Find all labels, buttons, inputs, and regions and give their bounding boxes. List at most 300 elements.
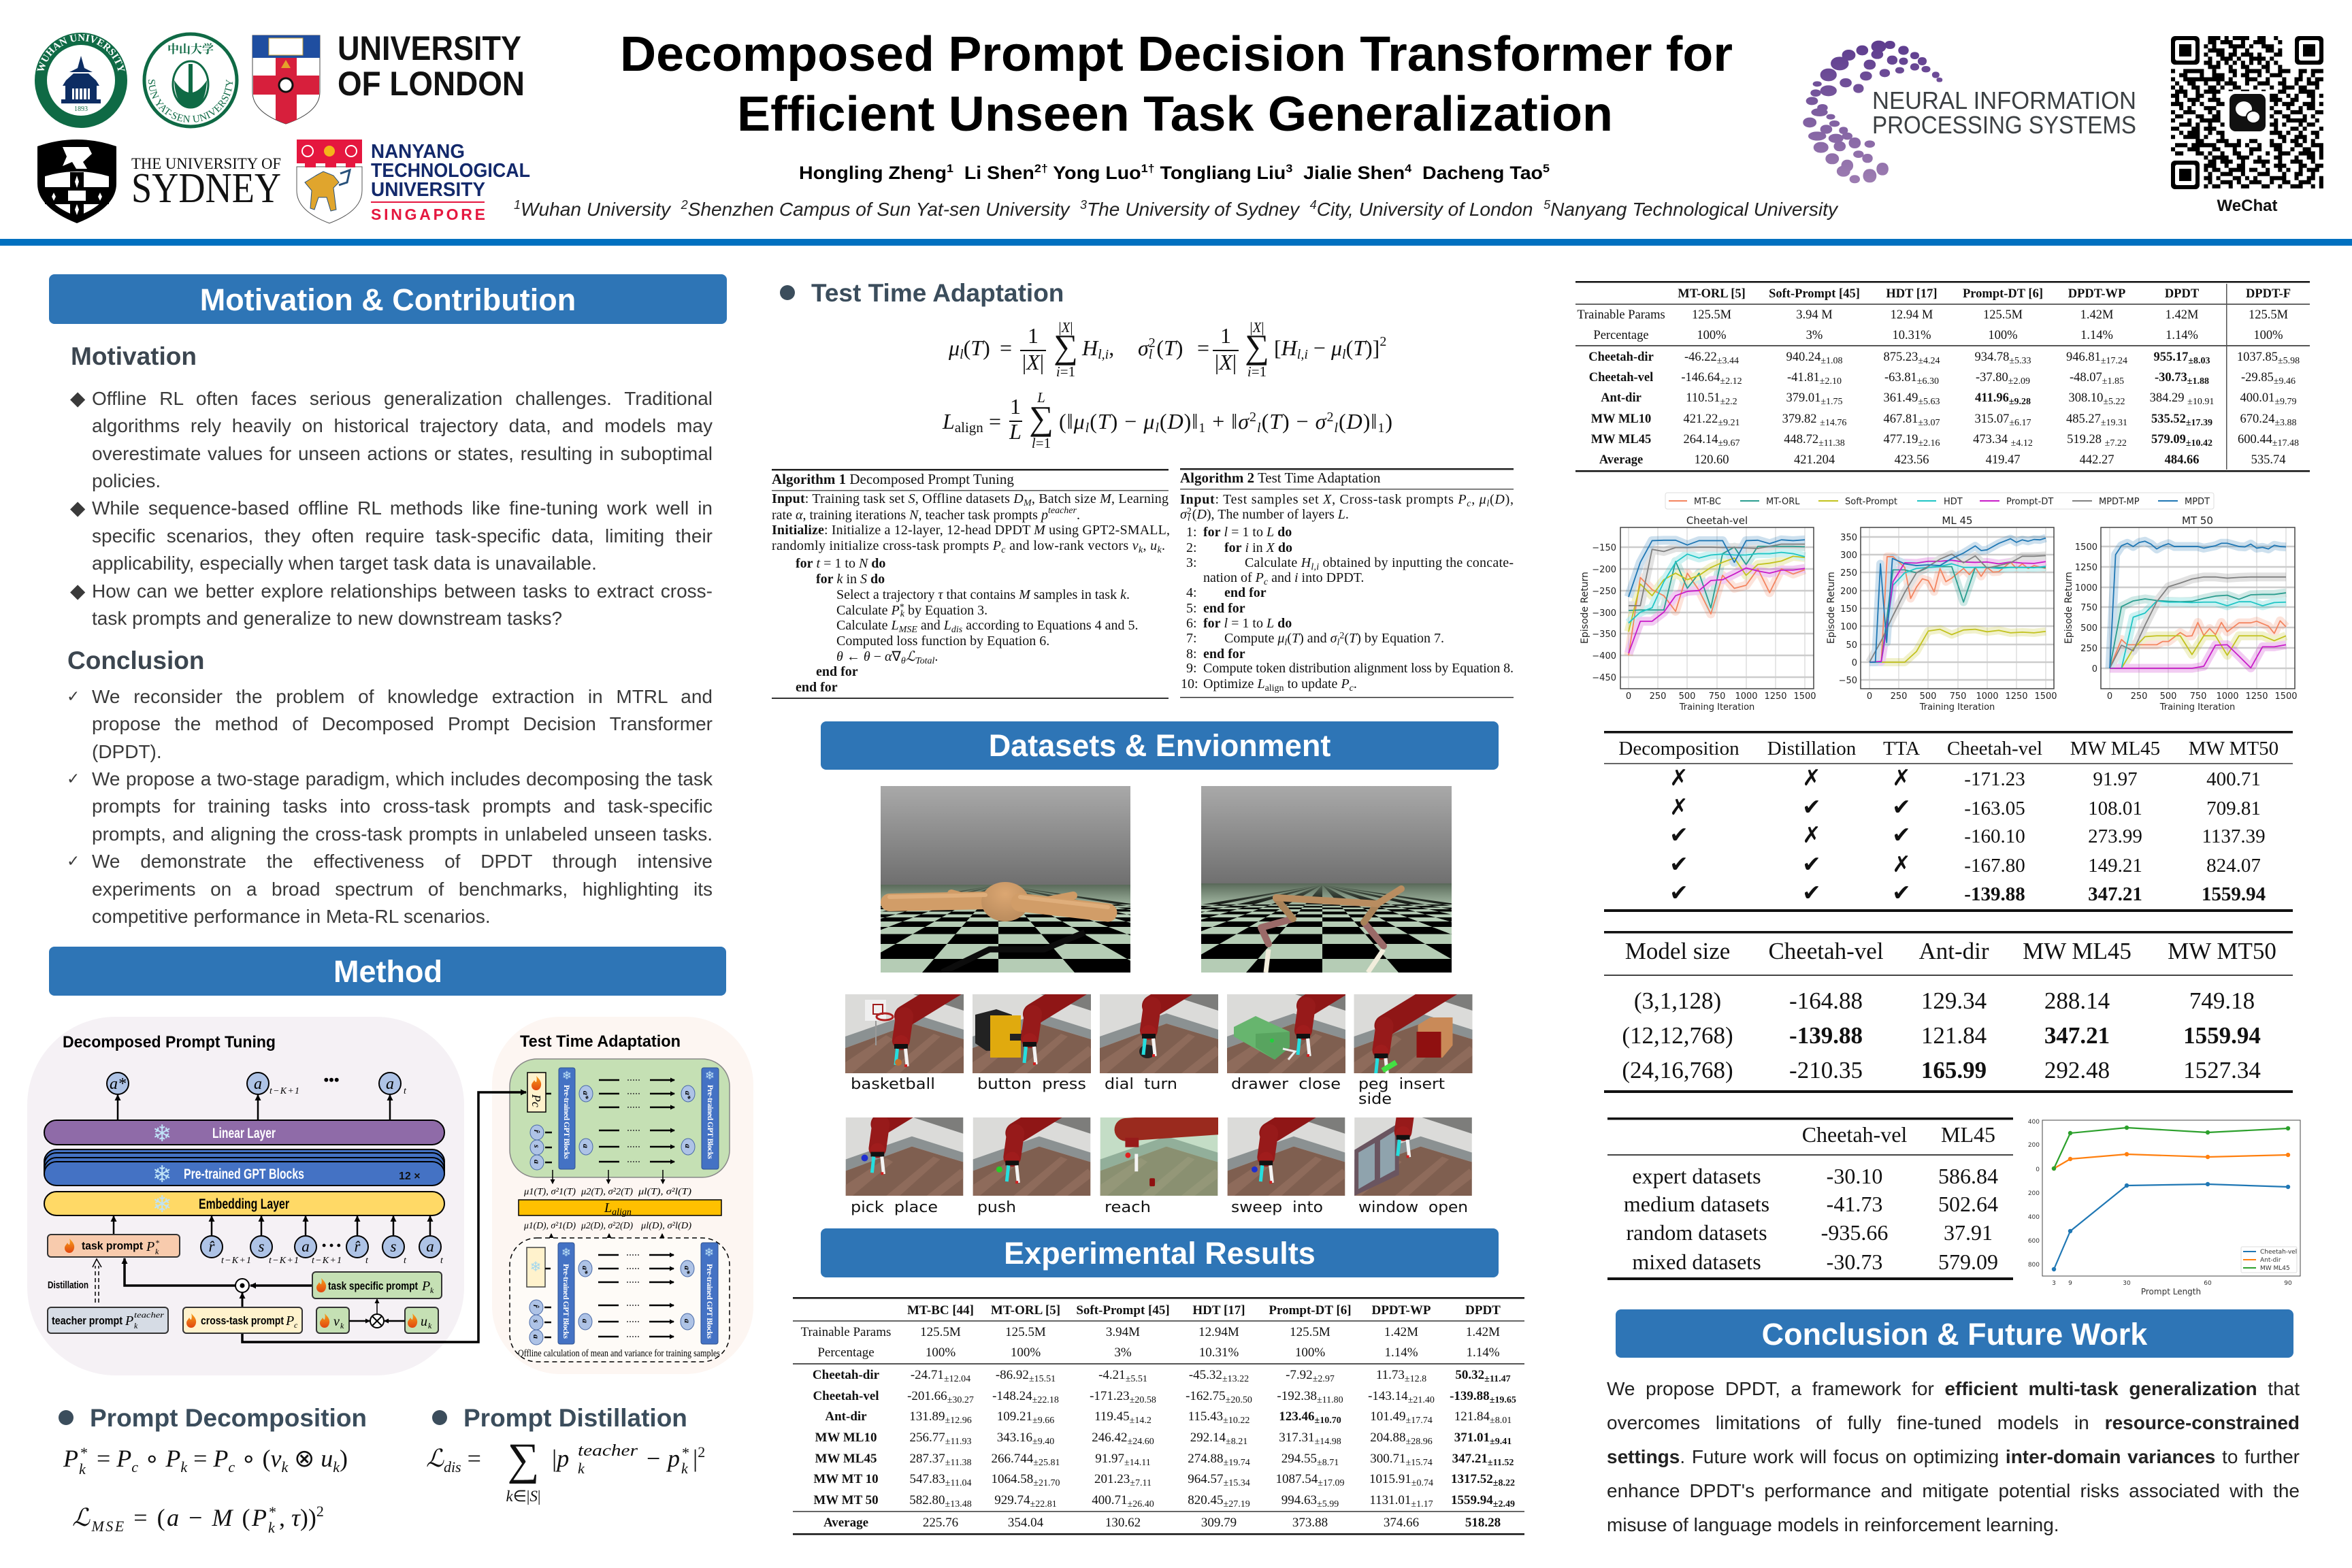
table: model size: (3,1,128)	[1634, 987, 1721, 1014]
table: experimental results: ±11.93	[945, 1437, 971, 1447]
line chart: ML 45: 750	[1950, 691, 1966, 702]
table: dataset quality: -30.73	[1827, 1250, 1882, 1274]
bullet: generalization challenges: algorithms rely heavily on historical trajectory data, and models may	[92, 415, 713, 436]
heading: Prompt Decomposition: Prompt Decomposition	[90, 1404, 367, 1432]
formula: prompt decomposition: k	[79, 1460, 86, 1477]
table: experimental results: 343.16	[997, 1431, 1054, 1447]
logo text: Nanyang Technological University Singapore: NANYANG	[371, 141, 465, 163]
logo text: University of London	[338, 29, 525, 103]
algorithm 1 box: .	[934, 649, 938, 664]
algorithm 1 box: end for	[816, 664, 858, 679]
line chart: Cheetah-vel: 1500	[1793, 691, 1816, 702]
algorithm 1 box: , Batch size	[1032, 491, 1100, 506]
green online network box: a	[683, 1144, 693, 1148]
section header: Conclusion & Future Work	[1616, 1309, 2293, 1358]
table: ablation study: ✔	[1669, 879, 1688, 906]
input tokens: s	[259, 1238, 265, 1255]
table: experimental results: 100%	[1295, 1345, 1325, 1360]
table: comparison with fine-tuned models: ±6.30	[1917, 376, 1939, 387]
algorithm 1 box: ,	[1143, 538, 1150, 553]
algorithm 2 box: nation of P	[1203, 570, 1264, 585]
algorithm 2 box: Optimize L	[1203, 676, 1265, 691]
formula: alignment loss: 2	[1326, 410, 1333, 425]
table: comparison with fine-tuned models: 421.204	[1794, 453, 1835, 467]
table: comparison with fine-tuned models: 110.51	[1686, 391, 1737, 407]
bullet: research question: task prompts and generalize to new downstream tasks?	[92, 608, 562, 629]
table: comparison with fine-tuned models: Ant-dir	[1601, 391, 1642, 405]
algorithm 2 box: D), The number of layers L.	[1196, 507, 1349, 522]
line chart: ML 45: 150	[1840, 604, 1857, 615]
formula: MSE loss: k	[268, 1519, 276, 1536]
table: experimental results: 10.31%	[1199, 1345, 1239, 1360]
table: comparison with fine-tuned models: ±9.67	[1718, 438, 1740, 448]
table: model size	[1604, 931, 2293, 1093]
algorithm 1 box: end for	[796, 680, 838, 695]
line chart: prompt length: 600	[2028, 1238, 2040, 1245]
algorithm 1 box: M, Learning	[1100, 491, 1169, 506]
algorithm 2 box: end for	[1203, 647, 1245, 662]
dashed offline network box: a	[581, 1319, 590, 1323]
table: experimental results: ±11.80	[1317, 1395, 1343, 1405]
table: comparison with fine-tuned models: ±5.22	[2103, 397, 2125, 407]
formula: mean and variance: T)	[1164, 336, 1183, 360]
formula: distillation loss: ∑	[507, 1435, 540, 1484]
table: experimental results: ±19.65	[1490, 1395, 1516, 1405]
algorithm 1 box: according to Equations 4 and 5.	[962, 618, 1139, 633]
formula: alignment loss: ∑	[1029, 399, 1054, 437]
input arrows	[114, 1216, 430, 1236]
affiliations: 1	[514, 198, 521, 212]
algorithm 2 box: Compute token distribution alignment loss by Equation 8.	[1203, 661, 1514, 676]
table: comparison with fine-tuned models: ±3.44	[1717, 356, 1739, 366]
pre-trained GPT blocks: Pre-trained GPT Blocks	[184, 1166, 304, 1182]
algorithm 1 box: Calculate L	[836, 618, 899, 633]
line chart: ML 45: Training Iteration	[1919, 702, 1995, 713]
green online network box: a	[581, 1144, 591, 1148]
algorithm 1 box: .	[1077, 508, 1080, 523]
algorithm 2 box: 2:	[1186, 540, 1197, 555]
table: dataset quality: 37.91	[1944, 1220, 1993, 1245]
table: experimental results: ±13.48	[945, 1499, 972, 1509]
table: experimental results: 1.42M	[1384, 1325, 1418, 1339]
table: comparison with fine-tuned models: 315.07	[1974, 412, 2031, 428]
formula: alignment loss: L	[1036, 389, 1045, 406]
line chart: ML 45: Episode Return	[1826, 572, 1837, 644]
table header: DPDT-F	[2246, 287, 2291, 301]
table: comparison with fine-tuned models: 400.01	[2240, 391, 2297, 407]
algorithm 1 box: Total	[915, 656, 935, 666]
formula: MSE loss	[72, 1503, 324, 1536]
table: model size: -139.88	[1789, 1022, 1863, 1049]
algorithm 1 box: Input: Training task set S, Offline datasets D	[772, 491, 1024, 506]
table: comparison with fine-tuned models: -46.22	[1684, 350, 1739, 366]
table: ablation study: ✔	[1802, 794, 1821, 820]
dashed offline network box: a	[532, 1335, 541, 1339]
logo text: Nanyang Technological University Singapore: UNIVERSITY	[371, 179, 485, 201]
table: experimental results: 130.62	[1105, 1516, 1141, 1530]
formula: distillation loss: k	[681, 1460, 689, 1477]
test statistics labels: μ2(T), σ²2(T)	[581, 1187, 633, 1197]
logo: Sun Yat-sen University: 中山大学	[167, 43, 214, 56]
table: comparison with fine-tuned models: Cheetah-dir	[1588, 350, 1654, 364]
table header: MT-BC [44]	[907, 1303, 974, 1318]
formula: mean and variance: T)	[970, 336, 990, 360]
line chart: ML 45: −50	[1839, 676, 1857, 686]
table: experimental results: -86.92	[996, 1368, 1056, 1384]
table header: MW MT50	[2168, 938, 2276, 964]
text block: conclusion and future work: settings. Future work will focus on optimizing inter-domain variances to further	[1607, 1446, 2300, 1467]
low-rank vector v_k	[316, 1307, 349, 1333]
table: experimental results: 201.23	[1094, 1472, 1152, 1488]
table: experimental results: ±7.11	[1130, 1478, 1152, 1488]
authors: 3	[1286, 162, 1292, 175]
logo: Wuhan University	[35, 33, 127, 128]
formula: alignment loss: (	[1090, 409, 1097, 434]
table: experimental results: 1087.54	[1276, 1472, 1344, 1488]
table: comparison with fine-tuned models: 361.49	[1883, 391, 1940, 407]
logo text: Neural Information Processing Systems	[1872, 86, 2136, 139]
table: comparison with fine-tuned models: 264.14	[1683, 433, 1740, 448]
line chart: ML 45: 0	[1867, 691, 1872, 702]
affiliations: 2	[681, 198, 688, 212]
table: comparison with fine-tuned models: ±2.16	[1918, 438, 1940, 448]
formula: prompt decomposition: =	[187, 1445, 213, 1472]
line chart: MT 50: 1250	[2075, 563, 2097, 573]
bullet: two-stage paradigm: prompts, and aligning the cross-task prompts in unlabeled unseen tasks.	[92, 823, 713, 845]
formula: MSE loss: 2	[316, 1503, 324, 1520]
authors: Li Shen	[953, 163, 1034, 183]
formula: distillation loss: p	[666, 1445, 680, 1472]
bullet: generalization challenges: Offline RL often faces serious generalization challenges. Traditional	[92, 388, 713, 409]
table: comparison with fine-tuned models: 535.52	[2151, 412, 2212, 428]
table: comparison with fine-tuned models: -41.81	[1787, 371, 1842, 387]
table: experimental results: ±5.51	[1126, 1374, 1147, 1384]
table: ablation study: ✔	[1669, 851, 1688, 877]
algorithm 2 box: c	[1350, 683, 1354, 693]
algorithm 1 box: c	[1001, 545, 1006, 555]
table: model size: 129.34	[1921, 987, 1987, 1014]
section header: Experimental Results	[821, 1228, 1499, 1277]
table: comparison with fine-tuned models: MW ML10	[1591, 412, 1651, 426]
algorithm 2 box: obtained by inputting the concate-	[1319, 555, 1514, 570]
low-rank vector v_k: v	[333, 1314, 340, 1329]
table header: DPDT-WP	[1372, 1303, 1431, 1318]
table: experimental results: ±11.47	[1484, 1374, 1511, 1384]
algorithm 2 box: T) and σ	[1292, 631, 1337, 646]
logo: Wuhan University: WUHAN UNIVERSITY	[37, 34, 125, 71]
table: experimental results: ±9.66	[1032, 1416, 1054, 1426]
affiliations: City, University of London	[1317, 199, 1544, 220]
input tokens: t − K + 1	[221, 1256, 251, 1266]
table: comparison with fine-tuned models: -146.64	[1681, 371, 1742, 387]
table: comparison with fine-tuned models: ±9.21	[1718, 418, 1740, 428]
embedding layer: Embedding Layer	[199, 1196, 289, 1212]
line chart: ML 45: 100	[1840, 622, 1857, 632]
table: comparison with fine-tuned models: ±2.12	[1720, 376, 1742, 387]
table: ablation study: ✔	[1802, 879, 1821, 906]
table: comparison with fine-tuned models: ±17.24	[2101, 356, 2127, 366]
table: ablation study: 709.81	[2206, 798, 2261, 819]
algorithm 2 box: Input: Test samples set X, Cross-task prompts P	[1180, 492, 1467, 507]
dashed offline network box: ❄	[530, 1258, 541, 1275]
task labels: basketball	[851, 1076, 935, 1093]
table: experimental results: ±2.49	[1493, 1499, 1515, 1509]
green online network box: a*	[683, 1091, 693, 1100]
line chart: ML 45: 1500	[2034, 691, 2057, 702]
linear layer: ❄	[152, 1120, 172, 1147]
formula: alignment loss: 1	[1198, 421, 1205, 436]
formula: distillation loss: k∈|S|	[506, 1488, 540, 1505]
table: experimental results: ±15.74	[1406, 1458, 1433, 1468]
affiliations: 3	[1080, 198, 1087, 212]
line chart: Cheetah-vel: −400	[1592, 651, 1616, 662]
formula: alignment loss: T) − μ	[1098, 409, 1154, 434]
table: comparison with fine-tuned models: 100%	[1697, 329, 1727, 342]
line chart: prompt length: 9	[2068, 1280, 2072, 1287]
line chart: Cheetah-vel: −150	[1592, 543, 1616, 553]
algorithm 1 box: MSE	[898, 625, 917, 635]
algorithm 1 box: M	[1023, 498, 1032, 508]
formula: mean and variance: μ	[949, 336, 960, 360]
authors: 1†	[1141, 162, 1155, 175]
table: ablation study: -167.80	[1964, 855, 2025, 877]
table: experimental results: 582.80	[909, 1493, 972, 1509]
algorithm 2 box: ,	[1471, 492, 1479, 507]
input tokens: t − K + 1	[269, 1256, 299, 1266]
formula: mean and variance: l	[960, 347, 964, 362]
table: experimental results: ±9.41	[1490, 1437, 1512, 1447]
table: experimental results: ±1.17	[1411, 1499, 1433, 1509]
logo text: Neural Information Processing Systems: NEURAL INFORMATION	[1872, 86, 2136, 114]
table: dataset quality: -30.10	[1827, 1164, 1882, 1188]
outer product operator	[349, 1314, 405, 1328]
section header: Method	[49, 947, 726, 996]
formula: distillation loss: k	[578, 1460, 585, 1477]
line chart: MT 50: 500	[2160, 691, 2176, 702]
table: experimental results: ±8.01	[1490, 1416, 1512, 1426]
line chart: MT 50	[2063, 514, 2298, 713]
formula: mean and variance: μ	[1330, 336, 1342, 360]
line chart: Cheetah-vel: −200	[1592, 565, 1616, 575]
line chart: prompt length: 200	[2028, 1142, 2040, 1149]
output tokens: •••	[323, 1071, 340, 1088]
table: experimental results: 1131.01	[1369, 1493, 1433, 1509]
algorithm 1 box: k	[1157, 545, 1162, 555]
algorithm 2 box: (	[1344, 631, 1349, 646]
algorithm 1 box: teacher	[1048, 506, 1077, 516]
algorithm 2 box: 10:	[1181, 676, 1198, 691]
algorithm 2 box: for i in X do	[1224, 540, 1292, 555]
table: model size: (24,16,768)	[1622, 1057, 1733, 1083]
table: ablation study: ✗	[1669, 794, 1688, 820]
task labels: dial turn	[1105, 1076, 1177, 1093]
algorithm 1 box: by Equation 3.	[904, 603, 987, 618]
table: comparison with fine-tuned models: ±9.46	[2274, 376, 2296, 387]
line chart: ML 45: 1250	[2005, 691, 2028, 702]
line chart: MT 50: 750	[2190, 691, 2206, 702]
table: experimental results: ±9.40	[1032, 1437, 1054, 1447]
table: comparison with fine-tuned models: -37.80	[1976, 371, 2030, 387]
low-rank vector u_k: k	[428, 1321, 432, 1330]
section header: Datasets & Envionment	[821, 721, 1499, 770]
table header: DPDT	[2165, 287, 2200, 301]
section header: Experimental Results: Experimental Results	[1004, 1236, 1316, 1271]
logo: Nanyang Technological University crest	[297, 140, 362, 223]
formula: distillation loss: *	[681, 1444, 689, 1461]
algorithm 1 box: ℒ	[906, 649, 916, 664]
table: experimental results: 1317.52	[1451, 1472, 1515, 1488]
line chart: ML 45	[1826, 514, 2057, 713]
task image: basketball	[845, 994, 964, 1073]
table: experimental results: ±19.74	[1224, 1458, 1250, 1468]
text block: conclusion and future work: overcomes limitations of fully fine-tuned models in resource-constrained	[1607, 1412, 2300, 1433]
table: experimental results: ±8.21	[1226, 1437, 1247, 1447]
table: comparison with fine-tuned models: Average	[1599, 453, 1643, 467]
line chart: ML 45: 250	[1840, 568, 1857, 578]
table: ablation study: ✗	[1669, 764, 1688, 791]
bullet: sequence-based methods	[70, 496, 713, 574]
algorithm 1 box: for t = 1 to N do	[796, 556, 885, 571]
table: comparison with fine-tuned models: 600.44	[2238, 433, 2299, 448]
formula: alignment loss: (	[1339, 409, 1346, 434]
table: comparison with fine-tuned models: ±2.10	[1820, 376, 1842, 387]
linear layer: Linear Layer	[212, 1126, 276, 1141]
table: dataset quality: medium datasets	[1624, 1192, 1769, 1216]
table: experimental results: ±12.04	[944, 1374, 970, 1384]
table: experimental results: MW ML45	[815, 1452, 877, 1466]
logo: University of Sydney	[37, 140, 116, 223]
table: ablation study: ✗	[1892, 851, 1911, 877]
pre-trained GPT blocks	[44, 1149, 444, 1188]
algorithm 2 box: (	[1490, 492, 1494, 507]
table: comparison with fine-tuned models: 1037.85	[2237, 350, 2300, 366]
line chart: prompt length: 90	[2284, 1280, 2292, 1287]
line chart: ML 45: ML 45	[1942, 514, 1973, 527]
task image: pick place	[845, 1117, 964, 1196]
table: experimental results: ±13.22	[1222, 1374, 1249, 1384]
table: comparison with fine-tuned models: 308.10	[2068, 391, 2125, 407]
table: experimental results: 964.57	[1188, 1472, 1250, 1488]
table: comparison with fine-tuned models: 125.5M	[2249, 308, 2288, 322]
formula: MSE loss: *	[268, 1503, 276, 1520]
table header: HDT [17]	[1192, 1303, 1245, 1318]
task prompt box: *	[155, 1238, 159, 1247]
task labels: drawer close	[1231, 1076, 1341, 1093]
formula: distillation loss: dis	[444, 1458, 461, 1475]
train statistics labels: μl(D), σ²l(D)	[640, 1221, 691, 1231]
table: experimental results: 1015.91	[1369, 1472, 1433, 1488]
table: comparison with fine-tuned models: 419.47	[1986, 453, 2020, 467]
table: experimental results: ±12.8	[1405, 1374, 1426, 1384]
text: ✓	[67, 770, 80, 788]
table: experimental results: 371.01	[1454, 1431, 1512, 1447]
formula: prompt decomposition: *	[80, 1444, 87, 1461]
table: comparison with fine-tuned models: ±2.2	[1720, 397, 1737, 407]
table: experimental results: ±26.40	[1128, 1499, 1154, 1509]
line chart: prompt length: Prompt Length	[2141, 1287, 2201, 1296]
dashed offline network box: r̂	[532, 1305, 541, 1308]
line chart: prompt length: Cheetah-vel	[2260, 1249, 2297, 1256]
line chart: Cheetah-vel: −450	[1592, 673, 1616, 683]
line chart: Cheetah-vel: 250	[1650, 691, 1666, 702]
line chart: MT 50: 1500	[2274, 691, 2298, 702]
line chart: ML 45: 0	[1852, 658, 1857, 668]
formula: prompt decomposition: k	[333, 1458, 340, 1475]
task labels: pick place	[851, 1199, 938, 1216]
authors: 2†	[1034, 162, 1048, 175]
table: ablation study: ✗	[1892, 764, 1911, 791]
table: experimental results: MW MT 10	[813, 1472, 879, 1486]
algorithm 2 box: i into DPDT.	[1294, 570, 1364, 585]
heading: Motivation: Motivation	[71, 342, 197, 370]
table header: Prompt-DT [6]	[1269, 1303, 1352, 1318]
table: comparison with fine-tuned models: ±3.07	[1918, 418, 1940, 428]
text: ✓	[67, 853, 80, 870]
heading: Prompt Distillation: Prompt Distillation	[463, 1404, 687, 1432]
formula: alignment loss: l	[1155, 421, 1159, 436]
table: dataset quality: -935.66	[1821, 1220, 1888, 1245]
line chart: MT 50: 0	[2092, 664, 2097, 674]
table: experimental results: -139.88	[1450, 1389, 1516, 1405]
table: experimental results: -45.32	[1189, 1368, 1249, 1384]
authors: Tongliang Liu	[1155, 163, 1286, 183]
algorithm 1 box: v	[1132, 538, 1139, 553]
hadamard operator	[235, 1279, 249, 1292]
table: ablation study: ✗	[1802, 821, 1821, 848]
line chart: MT 50: 1000	[2216, 691, 2239, 702]
text block: conclusion bullets	[92, 683, 713, 930]
line chart: Cheetah-vel: −350	[1592, 630, 1616, 640]
table: comparison with fine-tuned models: 379.82	[1782, 412, 1846, 428]
table: ablation study: 149.21	[2088, 855, 2142, 877]
table: comparison with fine-tuned models: ±9.79	[2274, 397, 2297, 407]
table: experimental results: ±15.34	[1224, 1478, 1250, 1488]
bullet: reconsider problem: We reconsider the problem of knowledge extraction in MTRL and	[92, 686, 713, 707]
table: ablation study: 91.97	[2093, 768, 2138, 790]
table: experimental results: ±14.98	[1315, 1437, 1341, 1447]
algorithm 2 box: 5:	[1186, 601, 1197, 616]
formula: distillation loss: −	[647, 1445, 660, 1472]
algorithm 2 box: 1:	[1186, 525, 1197, 540]
formula: mean and variance: ∑	[1054, 327, 1078, 365]
table: ablation study: ✔	[1892, 794, 1911, 820]
task image: drawer close	[1227, 994, 1345, 1073]
logo text: Nanyang Technological University Singapore	[371, 141, 530, 223]
table: comparison with fine-tuned models: ±10.91	[2187, 397, 2214, 407]
cross-task prompt box: P	[285, 1313, 294, 1328]
table header: ML45	[1941, 1122, 1995, 1147]
table header: Decomposition	[1618, 738, 1740, 760]
formula: alignment loss: (	[1262, 409, 1269, 434]
table: ablation study: -160.10	[1964, 826, 2025, 847]
line chart: Cheetah-vel: 0	[1626, 691, 1631, 702]
table: model size: 749.18	[2189, 987, 2255, 1014]
train statistics labels: μ1(D), σ²1(D)	[523, 1221, 576, 1231]
formula: mean and variance: (	[1156, 336, 1164, 360]
table: comparison with fine-tuned models: 670.24	[2240, 412, 2297, 428]
table: experimental results: MW MT 50	[813, 1493, 879, 1507]
teacher prompt box: teacher	[134, 1310, 164, 1320]
formula: alignment loss: D)‖	[1168, 409, 1198, 434]
logo text: Nanyang Technological University Singapore: SINGAPORE	[371, 206, 485, 223]
line chart: MT 50: MT 50	[2182, 514, 2213, 527]
algorithm 2 box: l	[1486, 499, 1489, 509]
algorithm 1 box: θ	[901, 656, 906, 666]
dashed offline network box: Offline calculation of mean and variance for training samples	[518, 1348, 720, 1359]
output tokens: a	[386, 1075, 394, 1093]
logo text: Nanyang Technological University Singapore: TECHNOLOGICAL	[371, 160, 530, 182]
algorithm 2 box: 8:	[1186, 647, 1197, 662]
